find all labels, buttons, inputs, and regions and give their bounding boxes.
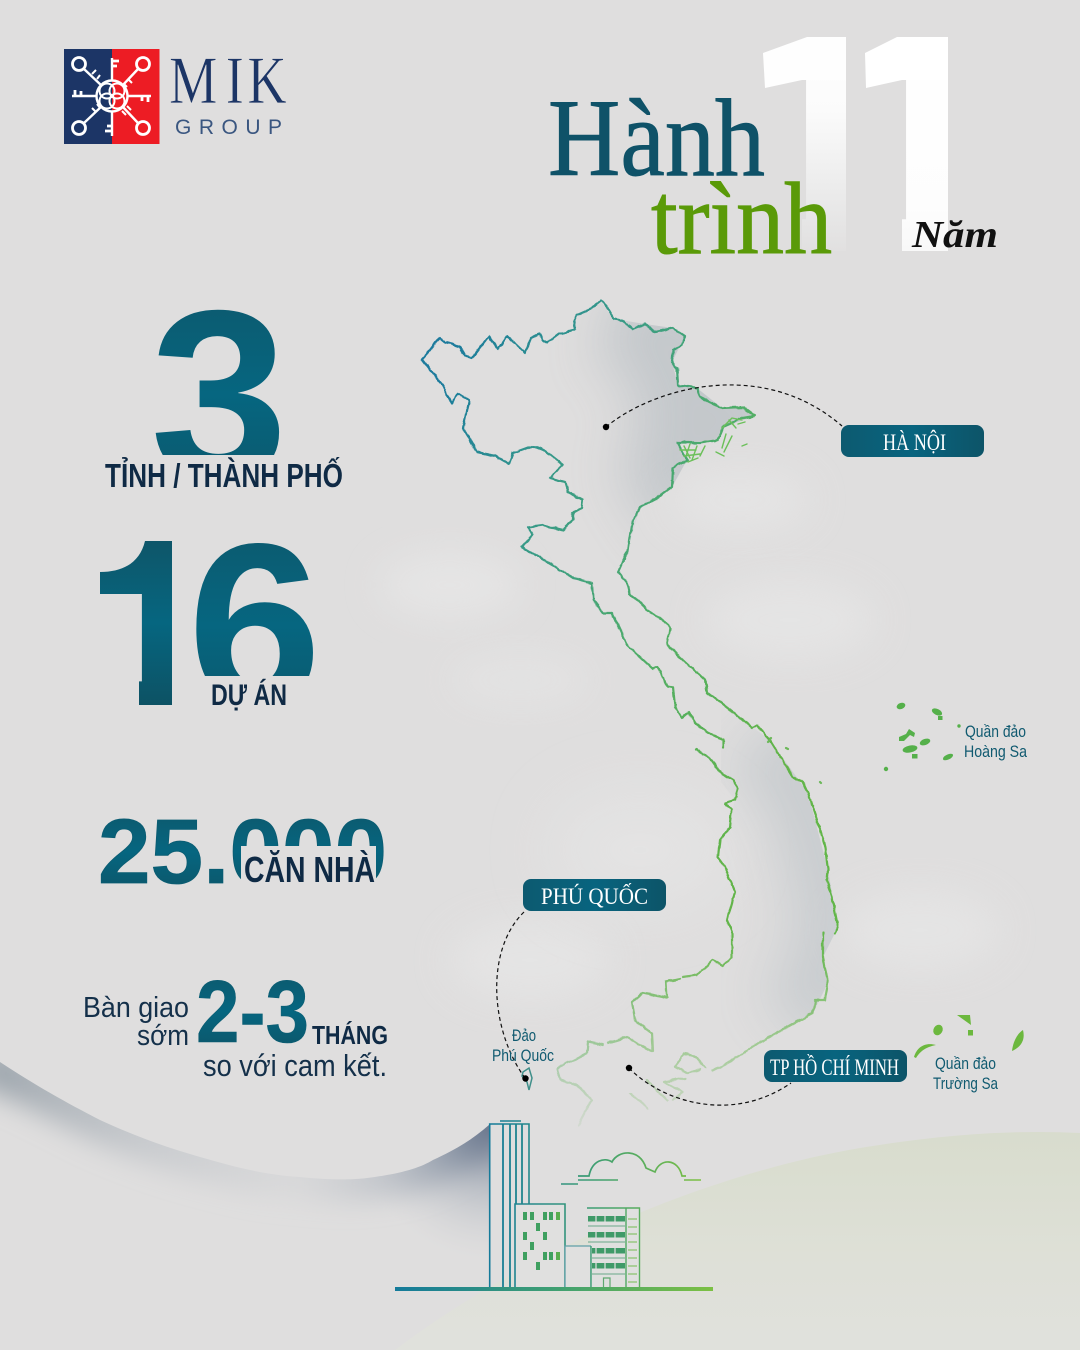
label 25.000: CĂN NHÀ	[244, 849, 375, 890]
map: northeast islands	[680, 418, 747, 462]
label 3: TỈNH / THÀNH PHỐ	[105, 456, 343, 494]
bottom left curved shadow	[0, 1062, 489, 1232]
map of Vietnam	[422, 301, 1027, 1125]
stat: 25.000 căn nhà	[98, 801, 387, 903]
label: Quần đảo Trường Sa	[933, 1054, 998, 1093]
text: sớm: sớm	[137, 1020, 189, 1052]
number 3: 3	[150, 260, 288, 529]
connector: Hà Nội	[606, 385, 842, 427]
city illustration	[395, 1121, 713, 1291]
label backing	[241, 846, 376, 888]
bottom right green hill	[395, 1132, 1080, 1350]
number 16: 1	[65, 496, 248, 755]
Phu Quoc island	[522, 1068, 532, 1090]
map: central islands	[768, 738, 821, 783]
label: Đảo Phú Quốc: Đảo	[512, 1026, 536, 1045]
marker: Phú Quốc	[522, 1075, 529, 1082]
text: Bàn giao: Bàn giao	[83, 992, 189, 1024]
number 2-3: 2-3	[196, 962, 309, 1061]
stat: 16 dự án	[100, 541, 313, 710]
number 25.000: 25.000	[98, 801, 387, 903]
label: Đảo Phú Quốc	[492, 1026, 554, 1065]
title: Hành: Hành	[548, 77, 765, 199]
label: Quần đảo Trường Sa: Quần đảo	[935, 1054, 996, 1073]
marker: Hà Nội	[603, 424, 609, 430]
label: Quần đảo Trường Sa: Trường Sa	[933, 1074, 998, 1093]
label: Quần đảo Hoàng Sa: Quần đảo	[965, 722, 1026, 741]
big faded number 11	[763, 37, 948, 251]
stat: bàn giao sớm 2-3 tháng	[83, 962, 388, 1083]
marker: TP Hồ Chí Minh	[626, 1065, 632, 1071]
label pill: Phú Quốc: PHÚ QUỐC	[541, 883, 648, 909]
Hoang Sa islands	[884, 702, 961, 771]
connector: Phú Quốc	[497, 912, 525, 1078]
logo wordmark GROUP: GROUP	[175, 116, 282, 139]
label: Quần đảo Hoàng Sa	[964, 722, 1027, 761]
label pill: Hà Nội	[841, 425, 984, 457]
logo: MIK Group	[64, 43, 287, 144]
text: so với cam kết: so với cam kết.	[203, 1048, 387, 1083]
map shading	[610, 318, 838, 1020]
label: Đảo Phú Quốc: Phú Quốc	[492, 1046, 554, 1065]
door	[604, 1278, 610, 1288]
label pill: TP Hồ Chí Minh: TP HỒ CHÍ MINH	[770, 1054, 899, 1080]
logo mark: keys on navy and red square	[64, 49, 160, 144]
ground line	[395, 1287, 713, 1291]
label pill: TP Hồ Chí Minh	[764, 1050, 907, 1082]
low building	[565, 1246, 591, 1288]
tower	[490, 1121, 529, 1288]
stat: 3 tỉnh thành phố	[105, 310, 342, 488]
right building	[587, 1208, 640, 1288]
number 16	[100, 541, 313, 705]
logo wordmark MIK: MIK	[169, 43, 287, 118]
label 16: DỰ ÁN	[211, 678, 287, 712]
text: THÁNG: THÁNG	[312, 1020, 388, 1050]
connector: TP Hồ Chí Minh	[629, 1068, 791, 1105]
cloud	[561, 1153, 701, 1184]
title: trình: trình	[651, 162, 832, 276]
label pill: Phú Quốc	[523, 879, 666, 911]
number 16: 6	[188, 496, 322, 755]
Truong Sa islands	[914, 1015, 1024, 1058]
map outline	[422, 301, 838, 1125]
label: Quần đảo Hoàng Sa: Hoàng Sa	[964, 742, 1027, 761]
label pill: Hà Nội: HÀ NỘI	[883, 429, 946, 455]
middle building	[515, 1204, 565, 1288]
title: Năm: Năm	[911, 214, 998, 256]
